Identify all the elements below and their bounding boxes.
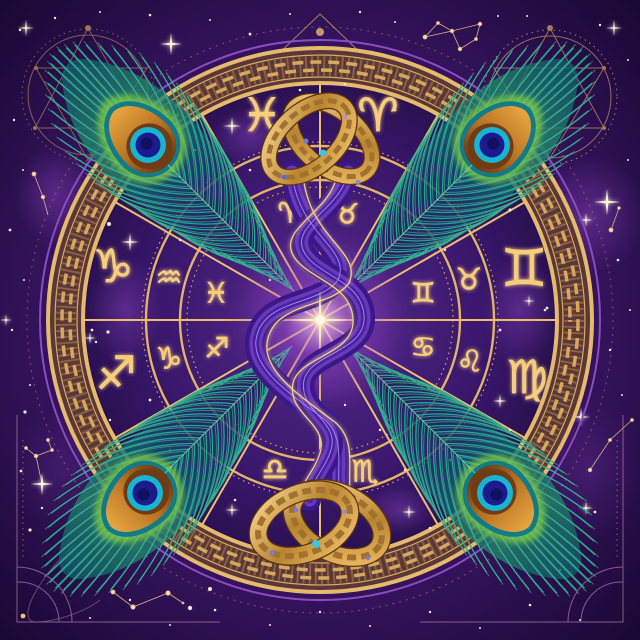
- zodiac wheel: [40, 40, 600, 600]
- sacred geometry top-right: [483, 25, 617, 164]
- inner symbols: ♓: [203, 276, 229, 310]
- ornate gold band: [48, 48, 592, 592]
- constellation left: [32, 172, 48, 215]
- center burst: [290, 290, 350, 350]
- outer symbols: ♈: [357, 88, 399, 142]
- inner ring lines: [142, 142, 498, 498]
- inner symbols: ♊: [410, 276, 436, 310]
- outer symbols: [92, 88, 548, 404]
- constellation top-right: [423, 22, 482, 51]
- middle symbols: [156, 260, 483, 490]
- peacock feather: top-left: [8, 5, 340, 337]
- outer symbols: ♓: [241, 88, 283, 142]
- inner disk: [82, 82, 558, 558]
- constellation right: [588, 207, 634, 472]
- radial dividers: [83, 83, 557, 557]
- outer symbols: ♑: [92, 239, 134, 293]
- disk sparkles: [84, 117, 535, 519]
- middle symbols: ♑: [156, 342, 182, 376]
- disk stars: [91, 83, 548, 529]
- top wedding rings: [255, 86, 386, 192]
- intertwined ribbons: [256, 172, 364, 503]
- peacock feather: top-right: [300, 5, 632, 337]
- middle symbols: ♒: [156, 260, 182, 296]
- outer symbols: ♍: [506, 350, 548, 404]
- center glow: [225, 225, 415, 415]
- peacock feather: bottom-left: [5, 301, 337, 633]
- middle symbols: ♌: [457, 344, 483, 380]
- inner symbols: [203, 196, 436, 364]
- outer thin circle: [40, 40, 600, 600]
- gems: [282, 115, 360, 184]
- peacock feather: bottom-right: [303, 301, 635, 633]
- sacred geometry top-left: [22, 25, 154, 161]
- middle symbols: ♏: [352, 454, 378, 490]
- corner frames bottom: [17, 415, 623, 622]
- constellation bottom-left: [24, 438, 54, 484]
- bottom wedding rings: [248, 474, 393, 572]
- left ring: [255, 86, 363, 192]
- sparkles background: [0, 20, 622, 515]
- right ring: [276, 87, 386, 191]
- outer symbols: ♊: [501, 239, 547, 299]
- top triangle ornament: [272, 14, 368, 60]
- outer symbols: ♐: [95, 346, 137, 400]
- inner symbols: ♉: [334, 198, 360, 230]
- inner symbols: ♈: [277, 196, 303, 230]
- left ring: [248, 477, 360, 569]
- right ring: [281, 474, 393, 572]
- middle symbols: ♎: [262, 452, 288, 488]
- zodiac symbols: [92, 88, 548, 490]
- inner symbols: ♐: [204, 332, 230, 364]
- middle symbols: ♉: [456, 262, 482, 298]
- disk nebula patches: [87, 107, 558, 534]
- inner symbols: ♋: [410, 330, 436, 364]
- gems: [270, 508, 370, 560]
- constellation bottom: [111, 590, 184, 609]
